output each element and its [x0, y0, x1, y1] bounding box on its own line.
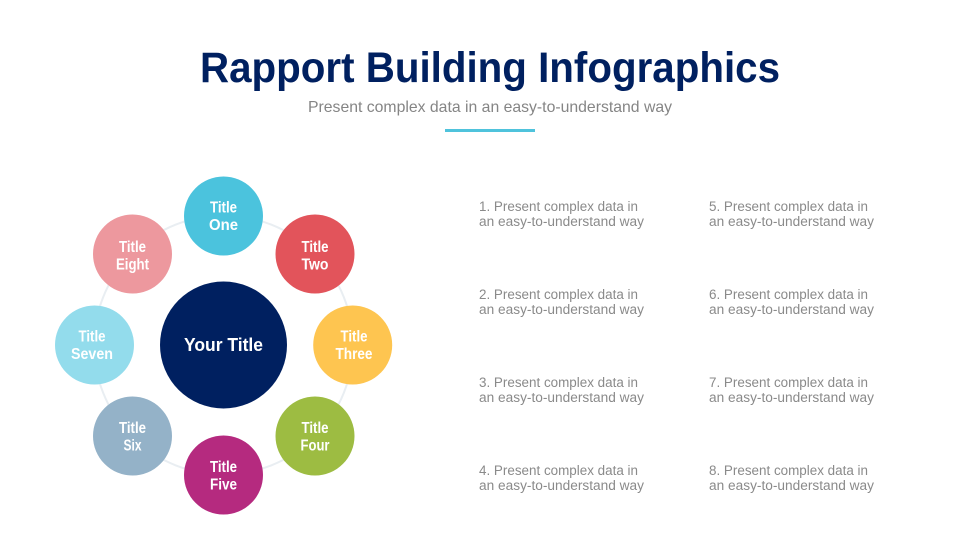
- text item 5: 5. Present complex data in: [709, 199, 868, 214]
- node: title three: Three: [336, 346, 373, 363]
- text item 7: an easy-to-understand way: [709, 390, 874, 405]
- node: title seven: Title: [78, 328, 106, 346]
- text item 4: 4. Present complex data in: [479, 463, 638, 478]
- connecting ring: [94, 216, 353, 474]
- node: title eight: Title: [119, 239, 146, 256]
- text item 4: [479, 463, 644, 493]
- node: title four: [276, 396, 354, 476]
- node: title four: Four: [300, 438, 330, 454]
- centre circle: your title: Your Title: [184, 335, 263, 355]
- node: title one: [184, 176, 263, 256]
- node: title eight: Eight: [116, 256, 149, 274]
- text item 8: [709, 463, 874, 493]
- text item 7: [709, 375, 874, 405]
- text item 1: [479, 199, 644, 229]
- text item 7: 7. Present complex data in: [709, 375, 868, 390]
- node: title one: Title: [210, 200, 237, 216]
- text item 6: an easy-to-understand way: [709, 302, 874, 317]
- text item 6: [709, 287, 874, 317]
- text item 2: [479, 287, 644, 317]
- text item 8: an easy-to-understand way: [709, 478, 874, 493]
- node: title two: Title: [302, 239, 329, 256]
- text item 3: 3. Present complex data in: [479, 375, 638, 390]
- text item 4: an easy-to-understand way: [479, 478, 644, 493]
- node: title five: Five: [210, 476, 237, 494]
- text item 6: 6. Present complex data in: [709, 287, 868, 302]
- node: title two: Two: [302, 256, 328, 274]
- node: title seven: Seven: [71, 346, 113, 363]
- title underline: [445, 129, 535, 132]
- node: title eight: [93, 214, 172, 294]
- node: title four: Title: [302, 420, 329, 437]
- node: title seven: [55, 306, 134, 384]
- text item 5: [709, 199, 874, 229]
- node: title six: Six: [124, 438, 142, 454]
- text item 5: an easy-to-understand way: [709, 214, 874, 229]
- text item 3: [479, 375, 644, 405]
- node: title five: [184, 436, 263, 514]
- centre circle: your title: [160, 282, 287, 408]
- title: Rapport Building Infographics: [200, 44, 780, 92]
- text item 2: an easy-to-understand way: [479, 302, 644, 317]
- node: title three: Title: [340, 328, 368, 346]
- circular diagram: [55, 176, 392, 514]
- text item 1: 1. Present complex data in: [479, 199, 638, 214]
- node: title three: [313, 306, 392, 384]
- node: title six: Title: [119, 420, 146, 437]
- subtitle: Present complex data in an easy-to-understand way: [308, 99, 672, 116]
- node: title one: One: [209, 217, 238, 234]
- text item 2: 2. Present complex data in: [479, 287, 638, 302]
- text item 1: an easy-to-understand way: [479, 214, 644, 229]
- text item 3: an easy-to-understand way: [479, 390, 644, 405]
- node: title six: [93, 396, 172, 476]
- text item 8: 8. Present complex data in: [709, 463, 868, 478]
- node: title five: Title: [210, 459, 237, 476]
- node: title two: [276, 214, 354, 294]
